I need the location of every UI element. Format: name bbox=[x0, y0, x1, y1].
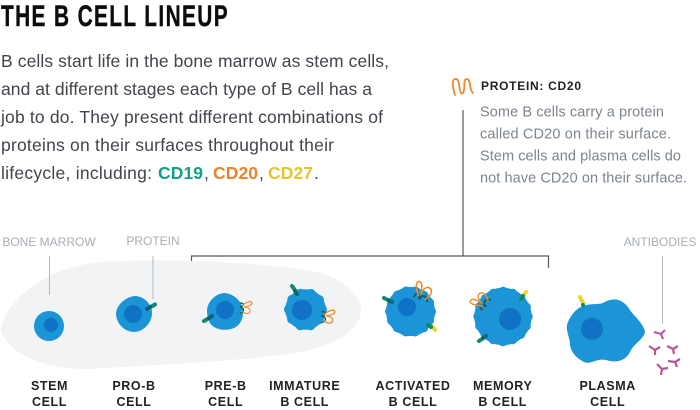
immature B cell label: B CELL bbox=[280, 395, 329, 409]
memory B cell label: B CELL bbox=[478, 395, 527, 409]
immature B cell label: IMMATURE bbox=[269, 379, 340, 393]
intro text block: CD20 bbox=[213, 163, 258, 183]
intro text block bbox=[0, 51, 389, 183]
memory B cell label: MEMORY bbox=[473, 379, 532, 393]
pro-B cell label: CELL bbox=[116, 395, 152, 409]
antibodies label: ANTIBODIES bbox=[624, 235, 696, 249]
activated B cell bbox=[384, 281, 435, 336]
leader: protein bbox=[152, 256, 154, 299]
antibodies bbox=[649, 330, 680, 375]
stem cell label: CELL bbox=[32, 395, 67, 409]
pro-B cell bbox=[116, 296, 155, 332]
intro text block: lifecycle, including: bbox=[1, 163, 152, 183]
icon: CD20 protein bbox=[453, 79, 473, 95]
immature B cell bbox=[285, 286, 335, 330]
activated B cell label: ACTIVATED bbox=[375, 379, 451, 393]
CD20 description: Stem cells and plasma cells do bbox=[480, 148, 681, 164]
intro text block: , bbox=[259, 163, 264, 183]
pre-B cell label: CELL bbox=[208, 395, 243, 409]
intro text block: and at different stages each type of B cell has a bbox=[1, 79, 372, 99]
CD20 heading: PROTEIN: CD20 bbox=[481, 79, 581, 93]
bracket linking CD20 to cell stages bbox=[192, 110, 548, 268]
bone marrow background bbox=[1, 260, 361, 369]
CD20 description: not have CD20 on their surface. bbox=[480, 170, 687, 186]
intro text block: job to do. They present different combinations of bbox=[0, 107, 383, 127]
CD20 description bbox=[480, 104, 687, 186]
leader: antibodies bbox=[662, 256, 664, 324]
intro text block: . bbox=[314, 163, 319, 183]
pro-B cell label: PRO-B bbox=[112, 379, 156, 393]
intro text block: CD27 bbox=[268, 163, 313, 183]
intro text block: proteins on their surfaces throughout their bbox=[1, 135, 334, 155]
CD20 description: Some B cells carry a protein bbox=[480, 104, 664, 120]
leader: bone marrow bbox=[48, 256, 50, 295]
stem cell label: STEM bbox=[31, 379, 68, 393]
stem cell bbox=[34, 311, 64, 341]
intro text block: , bbox=[204, 163, 209, 183]
plasma cell bbox=[567, 297, 645, 363]
pre-B cell bbox=[204, 293, 252, 330]
title: THE B CELL LINEUP bbox=[1, 0, 229, 33]
memory B cell bbox=[469, 288, 532, 345]
CD20 description: called CD20 on their surface. bbox=[480, 126, 671, 142]
intro text block: CD19 bbox=[158, 163, 203, 183]
pre-B cell label: PRE-B bbox=[205, 379, 247, 393]
bone marrow label: BONE MARROW bbox=[2, 235, 96, 249]
plasma cell label: PLASMA bbox=[580, 379, 636, 393]
activated B cell label: B CELL bbox=[389, 395, 437, 409]
intro text block: B cells start life in the bone marrow as stem cells, bbox=[1, 51, 389, 71]
protein label: PROTEIN bbox=[126, 234, 180, 248]
plasma cell label: CELL bbox=[590, 395, 625, 409]
